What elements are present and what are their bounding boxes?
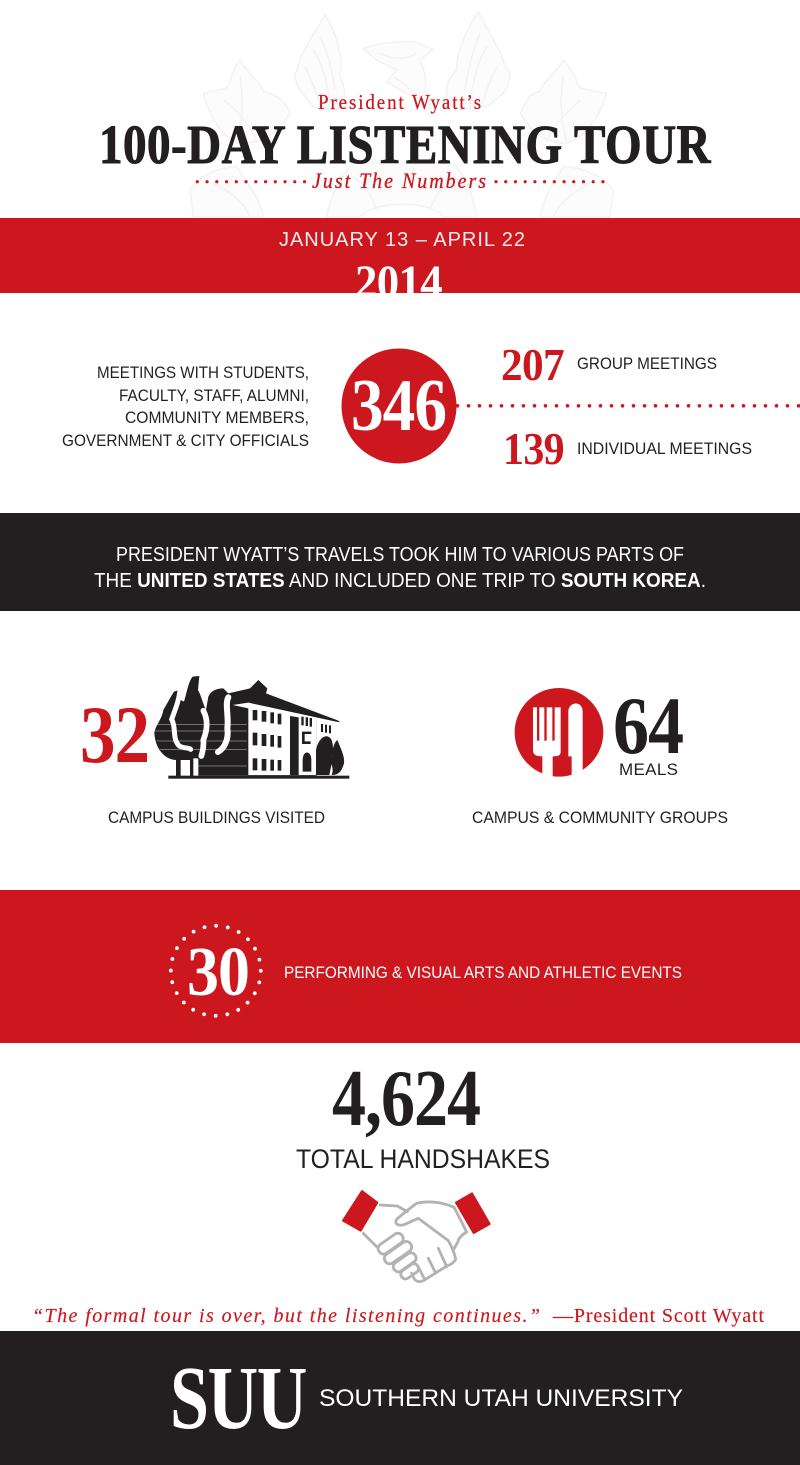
stat: 139 individual meetings: 139 [503,424,564,474]
text: meetings description: GOVERNMENT & CITY OFFICIALS [62,431,309,450]
panel: travels band [0,513,800,611]
logo: SUU: SUU [170,1349,306,1448]
panel: events band [0,890,800,1043]
stat: 4,624: 4,624 [332,1055,480,1143]
stat: 207 group meetings: GROUP MEETINGS [577,354,717,373]
year: 2014 [355,256,443,309]
stat: 207 group meetings: 207 [501,340,564,390]
stat: 64 meals: MEALS [619,760,678,779]
label: total handshakes: TOTAL HANDSHAKES [296,1144,550,1174]
icon: campus building and trees [154,676,349,779]
panel: footer [0,1331,800,1465]
badge: 346 meetings: 346 [351,365,446,447]
heading: President Wyatt's: President Wyatt’s [318,90,483,114]
university name: SOUTHERN UTAH UNIVERSITY [319,1385,683,1412]
subtitle with dotted rules: Just The Numbers [312,168,488,193]
quote: “The formal tour is over, but the listening continues.” [32,1305,540,1327]
stat: 32 buildings: 32 [80,689,149,780]
stat: 139 individual meetings [503,424,752,474]
quote: —President Scott Wyatt [552,1305,764,1327]
icon: fork and knife [515,688,603,777]
text: meetings description [62,363,309,450]
text: arts and athletic events: PERFORMING & VISUAL ARTS AND ATHLETIC EVENTS [284,963,682,982]
icon: handshake [343,1191,490,1282]
quote [32,1305,764,1327]
badge: 30 events: 30 [187,934,249,1011]
text: meetings description: MEETINGS WITH STUDENTS, [97,363,309,382]
griffin watermark [190,12,613,217]
panel: travels band: THE UNITED STATES AND INCLUDED ONE TRIP TO SOUTH KOREA. [94,570,706,592]
stat: 207 group meetings [501,340,717,390]
text: meetings description: FACULTY, STAFF, ALUMNI, [119,386,309,405]
label: campus and community groups: CAMPUS & COMMUNITY GROUPS [472,808,728,827]
stat: 64 meals: 64 [613,680,683,771]
text: meetings description: COMMUNITY MEMBERS, [125,408,309,427]
date range: JANUARY 13 – APRIL 22 [279,229,525,251]
badge: 346 meetings [342,348,456,464]
title: 100-DAY LISTENING TOUR [99,114,712,175]
panel: date band [0,218,800,293]
label: campus buildings visited: CAMPUS BUILDINGS VISITED [108,808,325,827]
stat: 139 individual meetings: INDIVIDUAL MEETINGS [577,439,752,458]
badge: 30 events [171,926,261,1016]
dotted connector [458,404,800,408]
panel: travels band: PRESIDENT WYATT’S TRAVELS TOOK HIM TO VARIOUS PARTS OF [116,544,684,566]
